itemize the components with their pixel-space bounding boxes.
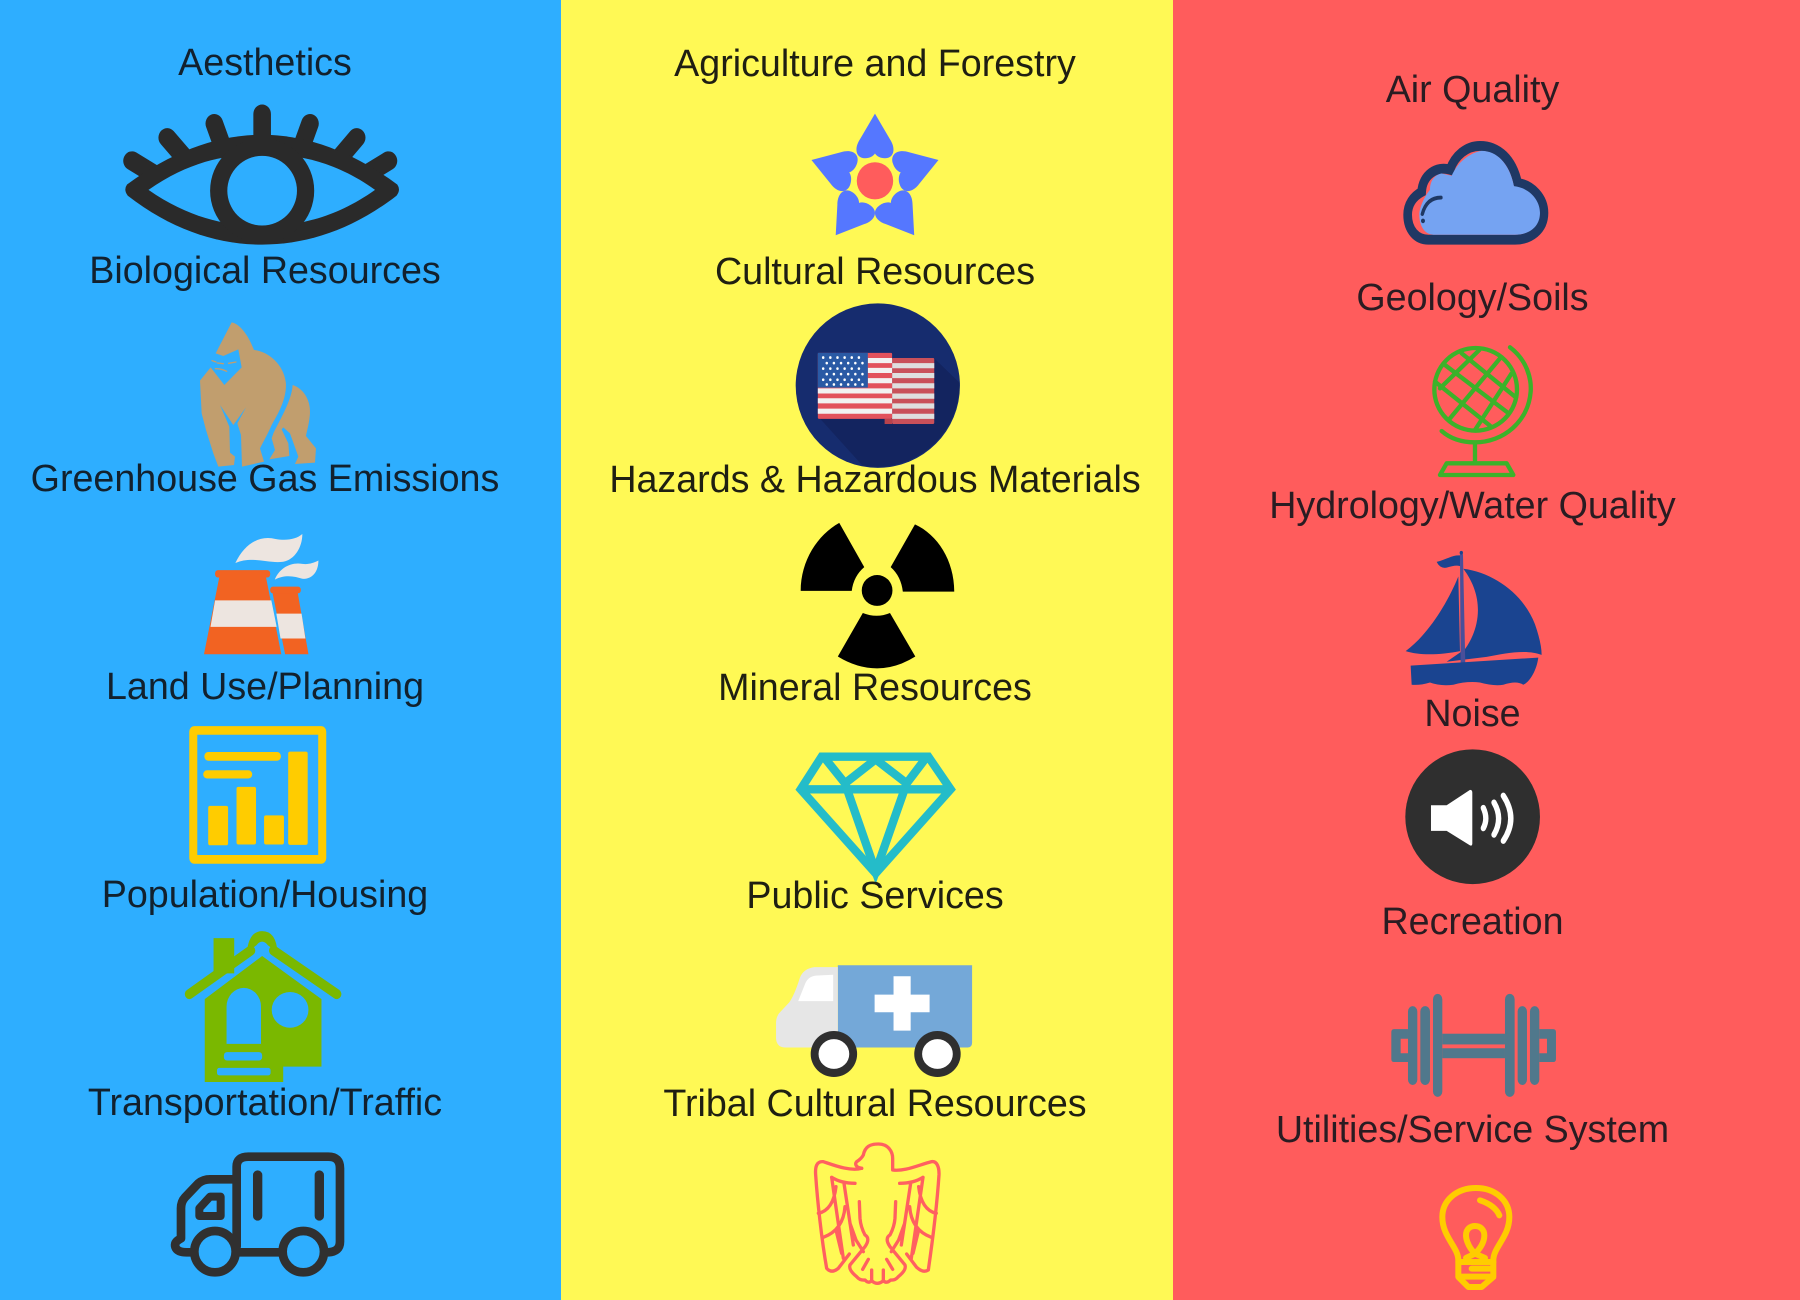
label: Utilities/Service System: Utilities/Service System <box>1276 1108 1669 1150</box>
label: Cultural Resources: Cultural Resources <box>715 250 1035 292</box>
label: Recreation: Recreation <box>1381 900 1564 942</box>
label: Population/Housing: Population/Housing <box>102 873 428 915</box>
label: Hydrology/Water Quality: Hydrology/Water Quality <box>1269 484 1676 526</box>
panel: blue column <box>0 0 561 1300</box>
icon: dumbbell <box>1391 994 1556 1097</box>
icon: cloud <box>1408 146 1544 240</box>
icon: star flower <box>805 114 945 247</box>
label: Transportation/Traffic: Transportation/Traffic <box>88 1081 442 1123</box>
label: Mineral Resources: Mineral Resources <box>718 666 1032 708</box>
icon: eye <box>125 114 399 245</box>
heading: Agriculture and Forestry: Agriculture and Forestry <box>674 42 1076 84</box>
heading: Aesthetics: Aesthetics <box>178 41 352 83</box>
icon: cooling towers <box>204 534 318 654</box>
icon: bar chart report <box>193 730 322 859</box>
panel: yellow column <box>561 0 1173 1300</box>
icon: speaker <box>1405 749 1540 884</box>
label: Public Services: Public Services <box>746 874 1004 916</box>
label: Geology/Soils: Geology/Soils <box>1356 276 1589 318</box>
heading: Air Quality: Air Quality <box>1386 68 1559 110</box>
icon: diamond <box>801 757 951 873</box>
label: Noise: Noise <box>1424 692 1521 734</box>
label: Hazards & Hazardous Materials: Hazards & Hazardous Materials <box>609 458 1141 500</box>
label: Tribal Cultural Resources: Tribal Cultural Resources <box>663 1082 1087 1124</box>
icon: radiation symbol <box>801 523 954 668</box>
icon: gorilla <box>200 322 316 467</box>
panel background: blue <box>0 0 561 1300</box>
panel background: yellow <box>561 0 1173 1300</box>
label: Greenhouse Gas Emissions: Greenhouse Gas Emissions <box>31 457 499 499</box>
icon: globe <box>1434 347 1531 475</box>
label: Biological Resources: Biological Resources <box>89 249 441 291</box>
label: Land Use/Planning: Land Use/Planning <box>106 665 424 707</box>
icon: light bulb <box>1442 1188 1509 1287</box>
icon: sailboat <box>1406 551 1542 685</box>
panel background: red <box>1173 0 1800 1300</box>
icon: house <box>189 931 337 1082</box>
icon: eagle <box>816 1144 939 1283</box>
panel: red column <box>1173 0 1800 1300</box>
icon: delivery truck <box>175 1157 340 1272</box>
icon: US flag badge <box>796 303 960 468</box>
icon: ambulance <box>776 965 972 1077</box>
